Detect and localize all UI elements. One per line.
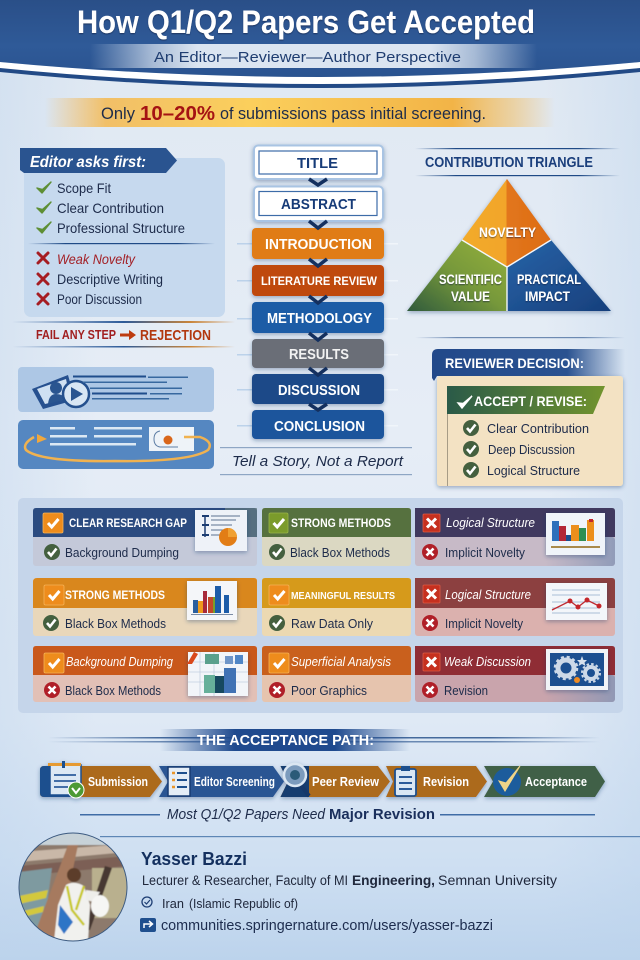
subtitle: An Editor—Reviewer—Author Perspective	[154, 49, 461, 66]
box: literature review	[252, 265, 384, 296]
card: background dumping: Black Box Methods	[65, 684, 161, 698]
fail any step callout: REJECTION	[140, 327, 211, 344]
step: revision	[386, 766, 487, 797]
accept / revise banner	[447, 386, 605, 414]
heading: the acceptance path: THE ACCEPTANCE PATH:	[197, 732, 374, 749]
box: conclusion	[252, 410, 384, 439]
thumbnail: gears	[546, 649, 608, 690]
checklist: positives	[37, 180, 185, 236]
step: peer review	[280, 764, 390, 797]
card: strong methods green: STRONG METHODS	[291, 518, 391, 530]
icon panel: video text lines	[18, 367, 214, 412]
author details	[140, 849, 557, 934]
fail any step callout: FAIL ANY STEP	[36, 328, 116, 342]
icon: document list	[168, 767, 190, 796]
chart: contribution triangle: VALUE	[451, 289, 490, 304]
fail any step callout	[12, 321, 235, 348]
caption: major revision: Most Q1/Q2 Papers Need	[167, 807, 326, 823]
screening banner: 10–20%	[140, 103, 215, 125]
story tagline: Tell a Story, Not a Report	[232, 453, 404, 470]
box: title: TITLE	[297, 155, 338, 172]
process: acceptance path steps	[40, 761, 605, 798]
card: background dumping	[33, 646, 257, 702]
checklist: positives: Scope Fit	[57, 180, 111, 196]
card: logical structure red	[415, 578, 615, 636]
reviewer heading	[432, 349, 625, 381]
author role: Lecturer & Researcher, Faculty of MI	[142, 873, 348, 888]
card: weak discussion	[415, 646, 615, 702]
box: introduction: INTRODUCTION	[265, 237, 372, 253]
box: conclusion: CONCLUSION	[274, 419, 365, 435]
cream card	[437, 376, 623, 486]
screening banner: of submissions pass initial screening.	[220, 104, 486, 123]
connector lines	[237, 243, 398, 426]
step: submission: Submission	[88, 775, 148, 789]
reviewer checklist: Logical Structure	[487, 463, 580, 478]
box: methodology	[252, 302, 384, 333]
box: introduction	[252, 228, 384, 259]
card: strong methods green: Black Box Methods	[290, 546, 390, 560]
header banner	[0, 0, 640, 88]
step: peer review: Peer Review	[312, 775, 379, 789]
box: results: RESULTS	[289, 347, 349, 363]
chart: contribution triangle: SCIENTIFIC	[439, 272, 502, 287]
step: acceptance	[484, 766, 605, 797]
panel: checklist grid	[18, 498, 623, 713]
card: superficial analysis: Superficial Analysis	[291, 655, 391, 669]
editor flag heading: Editor asks first:	[30, 154, 146, 171]
chart: contribution triangle	[407, 179, 611, 311]
flow chevrons	[309, 179, 327, 410]
icon panel: revision loop	[18, 420, 214, 469]
reviewer checklist: Clear Contribution	[487, 421, 589, 436]
checklist: negatives: Weak Novelty	[57, 252, 136, 267]
thumbnail: bar chart	[546, 513, 605, 555]
chart: contribution triangle: PRACTICAL	[517, 272, 581, 287]
card: weak discussion: Revision	[444, 684, 488, 698]
author name: Yasser Bazzi	[141, 849, 247, 869]
profile link: communities.springernature.com/users/yasser-bazzi	[161, 917, 493, 934]
checklist: positives: Professional Structure	[57, 220, 185, 236]
card: meaningful results: MEANINGFUL RESULTS	[291, 590, 395, 602]
card: superficial analysis	[262, 646, 411, 702]
editor flag heading	[20, 148, 177, 173]
screening banner	[45, 98, 555, 127]
heading: contribution triangle: CONTRIBUTION TRIANGLE	[425, 155, 593, 171]
thumbnail: column chart	[187, 581, 237, 620]
caption: major revision	[80, 807, 595, 823]
flow: paper sections	[237, 146, 398, 439]
location	[142, 896, 298, 911]
icon: magnifier	[284, 764, 309, 796]
thumbnail: outline with pie	[195, 510, 247, 551]
step: submission	[40, 761, 162, 798]
thumbnail: line chart	[546, 583, 607, 620]
reviewer heading: REVIEWER DECISION:	[445, 355, 584, 371]
caption: major revision: Major Revision	[329, 807, 435, 823]
card: weak discussion: Weak Discussion	[444, 655, 531, 669]
box: discussion: DISCUSSION	[278, 383, 360, 399]
checklist: positives: Clear Contribution	[57, 200, 164, 216]
step: acceptance: Acceptance	[525, 775, 587, 789]
box: literature review: LITERATURE REVIEW	[261, 274, 378, 288]
checklist: negatives	[38, 252, 163, 307]
box: methodology: METHODOLOGY	[267, 311, 372, 327]
card: clear research gap: CLEAR RESEARCH GAP	[69, 518, 187, 530]
chart: contribution triangle: IMPACT	[525, 289, 571, 304]
step: editor screening: Editor Screening	[194, 775, 275, 789]
card: logical structure red: Logical Structure	[445, 588, 531, 602]
step: editor screening	[159, 766, 284, 797]
card: strong methods green	[262, 508, 411, 566]
card: background dumping: Background Dumping	[66, 655, 173, 669]
author photo	[19, 833, 127, 941]
accept / revise banner: ACCEPT / REVISE:	[474, 393, 587, 409]
box: title	[254, 146, 383, 179]
author role: Semnan University	[438, 873, 557, 888]
card: meaningful results: Raw Data Only	[291, 617, 374, 631]
card: logical structure red: Implicit Novelty	[445, 617, 524, 631]
screening banner: Only	[101, 104, 135, 123]
card: strong methods orange	[33, 578, 257, 636]
subtitle	[90, 44, 537, 68]
box: discussion	[252, 374, 384, 404]
card: superficial analysis: Poor Graphics	[291, 684, 367, 698]
card: meaningful results	[262, 578, 411, 636]
panel: editor asks first	[20, 148, 225, 317]
card: clear research gap	[33, 508, 257, 566]
icon: check badge	[493, 766, 521, 796]
chart: contribution triangle: NOVELTY	[479, 224, 537, 240]
icon: clipboard	[48, 761, 84, 798]
author role	[142, 873, 557, 888]
title: How Q1/Q2 Papers Get Accepted	[77, 4, 535, 40]
thumbnail: spreadsheet	[187, 652, 248, 696]
heading: the acceptance path	[48, 729, 600, 751]
box: abstract: ABSTRACT	[281, 196, 356, 213]
icon: clipboard list	[395, 766, 416, 796]
card: clear research gap: Background Dumping	[65, 546, 179, 560]
panel: reviewer decision	[415, 337, 625, 486]
card: logical structure purple: Logical Structure	[446, 516, 535, 530]
location: (Islamic Republic of)	[189, 896, 298, 911]
location: Iran	[162, 896, 184, 911]
card: logical structure purple	[415, 508, 615, 566]
checklist: negatives: Descriptive Writing	[57, 272, 163, 287]
author role: Engineering,	[352, 873, 435, 888]
checklist: negatives: Poor Discussion	[57, 292, 142, 307]
reviewer checklist	[463, 420, 589, 478]
box: results	[252, 339, 384, 368]
card: strong methods orange: Black Box Methods	[65, 617, 166, 631]
card: logical structure purple: Implicit Novelty	[445, 546, 526, 560]
step: revision: Revision	[423, 775, 469, 789]
reviewer checklist: Deep Discussion	[488, 442, 575, 457]
box: abstract	[254, 186, 383, 221]
card: strong methods orange: STRONG METHODS	[65, 590, 165, 602]
